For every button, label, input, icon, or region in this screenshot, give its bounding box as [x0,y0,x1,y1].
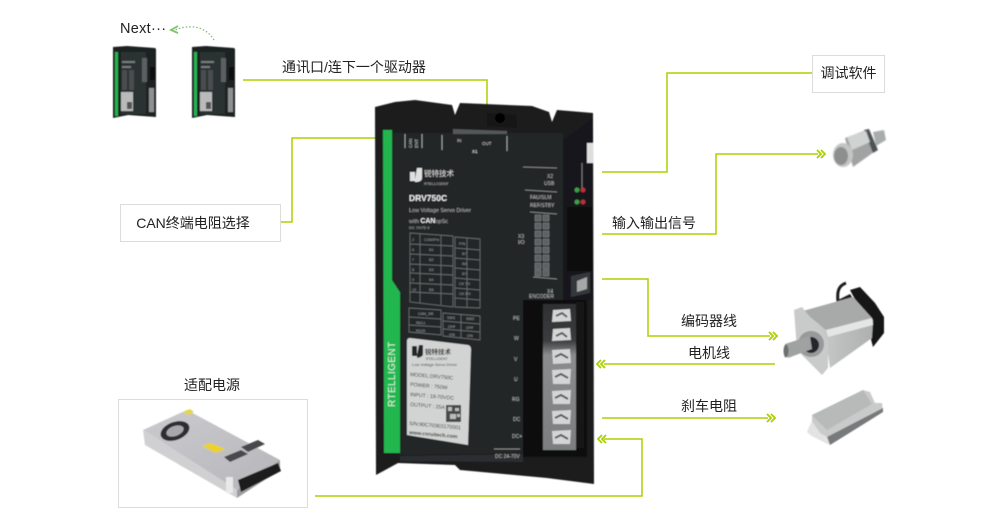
power terminal block [523,300,587,457]
DIP switch values: R120 [416,329,425,333]
power supply unit [143,410,280,490]
connector labels right column: REF/STBY [530,203,555,209]
connector: power supply line with arrow [315,435,642,496]
icon: connected servo drive [192,46,235,118]
warning sticker [202,443,225,453]
panel: power supply [118,400,308,508]
pinout table values: 6 [412,248,414,252]
nameplate label: POWER : 750W [410,382,448,391]
pinout table values: CK RX [459,292,471,296]
pinout table values: PIN [459,242,466,246]
pinout table values: 10 [412,288,416,292]
pinout table values: CK TX [459,282,471,286]
pinout table values: B2 [429,258,434,262]
product description [408,208,471,230]
logo: RTELLIGENT [424,181,449,186]
pinout table values: 2 [412,238,414,242]
connector labels right column: RG [512,397,520,403]
product description: with CANopSc [408,218,448,225]
DIP switch values [416,312,474,338]
DIP switch values: ON [467,334,473,338]
logo: 锐特技术 [424,168,454,178]
nameplate label: S/N:90C703E0170001 [409,421,461,432]
vents [224,440,265,462]
terminals [238,463,281,492]
DIP switch values: ON [449,333,455,337]
pinout table values: 8 [412,268,414,272]
panel: servo drive [375,100,594,484]
nameplate label [407,338,471,445]
label: brake resistor: 刹车电阻 [681,398,737,414]
connector labels right column: X2 [547,174,553,180]
connector labels right column: FAU/SLM [530,195,551,201]
nameplate label: OUTPUT : 25A [410,402,446,411]
connector: motor cable with arrow [597,360,775,368]
nameplate label: INPUT : 18-70VDC [410,392,454,402]
label box: debug software [812,56,884,92]
connector labels right column [494,167,557,460]
pinout table values: B5 [429,288,434,292]
top terminal markers: ENT [414,139,419,148]
pinout table values: COM/Pin [424,238,439,242]
pinout table values: B4 [429,278,434,282]
connector: brake resistor line with arrow [602,414,775,422]
IO terminal pins [535,215,549,276]
DIP switch values: SW1 [447,316,455,320]
top terminal markers: X1 [472,149,478,154]
pinout table values: B7 [462,252,467,256]
pinout table values [412,238,471,296]
mounting screw [487,113,517,128]
pinout table values: 9 [412,278,414,282]
pinout table values: B7- [462,272,469,276]
encoder port [571,272,590,297]
product description: DC 70/75 V [409,225,430,230]
icon: servo motor [784,283,884,375]
top terminal markers: IN [457,138,462,143]
connector labels right column: DC+ [512,434,522,440]
pinout table values: B8 [462,262,467,266]
label: encoder cable: 编码器线 [681,313,737,329]
label box: CAN terminal resistor selection [120,204,280,242]
pinout table [410,233,480,308]
icon: next servo drive [113,46,156,118]
connector labels right column: PE [513,316,520,322]
nameplate label: RTELLIGENT [426,357,448,361]
DIP switch values: OFF [448,325,456,329]
connector labels right column: DC [513,417,521,423]
logo [410,168,454,186]
label box: debug software: 调试软件 [820,65,876,81]
nameplate label: 锐特技术 [425,347,452,356]
DIP switch values: CAN_SR [418,312,434,316]
connector: communication port line [243,80,487,112]
connector labels right column: ENCODER [529,294,554,300]
green side label: RTELLIGENT [387,342,398,407]
connector labels right column: DC 24-70V [495,454,520,460]
connector labels right column: V [514,357,518,363]
connector: CAN terminal line [280,138,404,222]
icon: proximity sensor [833,129,886,167]
label: communication port: 通讯口/连下一个驱动器 [282,59,426,75]
arrow: dotted daisy-chain arrow [171,26,214,40]
top terminal markers: OUT [482,141,492,146]
connector labels right column: W [514,336,519,342]
icon: brake resistor [807,390,883,445]
label box: CAN terminal resistor selection: CAN终端电阻选择 [136,215,250,231]
connector labels right column: U [514,377,518,383]
connector: debug software line [602,73,812,172]
label: IO signals: 输入输出信号 [612,215,696,231]
DIP switch values: SW2 [466,317,474,321]
nameplate label: MODEL:DRV750C [410,372,454,382]
nameplate label: Low Voltage Servo Driver [412,362,458,367]
connector: IO signal line with arrow [602,150,825,234]
cooling fan [158,417,192,445]
connector labels right column: X3 [518,234,524,240]
product description: Low Voltage Servo Driver [409,208,471,214]
connector labels right column: X4 [547,289,553,295]
top terminal markers: CAN [408,138,413,148]
nameplate label: www.csruitech.com [408,430,458,440]
side IO connector [567,143,593,271]
connector: encoder cable with arrow [602,279,777,340]
pinout table values: B1 [429,248,434,252]
label: motor cable: 电机线 [688,345,730,361]
title: next drive label: Next··· [120,21,166,37]
DIP switch table [409,308,480,340]
pinout table values: 7 [412,258,414,262]
model heading: DRV750C [409,193,447,203]
connector labels right column: USB [544,181,555,187]
top terminal markers [405,134,507,154]
drive body [375,100,594,484]
label: compatible power supply: 适配电源 [184,377,240,393]
DIP switch values: OFF [466,326,474,330]
pinout table values: B3 [429,268,434,272]
connector labels right column: I/O [518,240,525,246]
DIP switch values: NULL [416,321,426,325]
